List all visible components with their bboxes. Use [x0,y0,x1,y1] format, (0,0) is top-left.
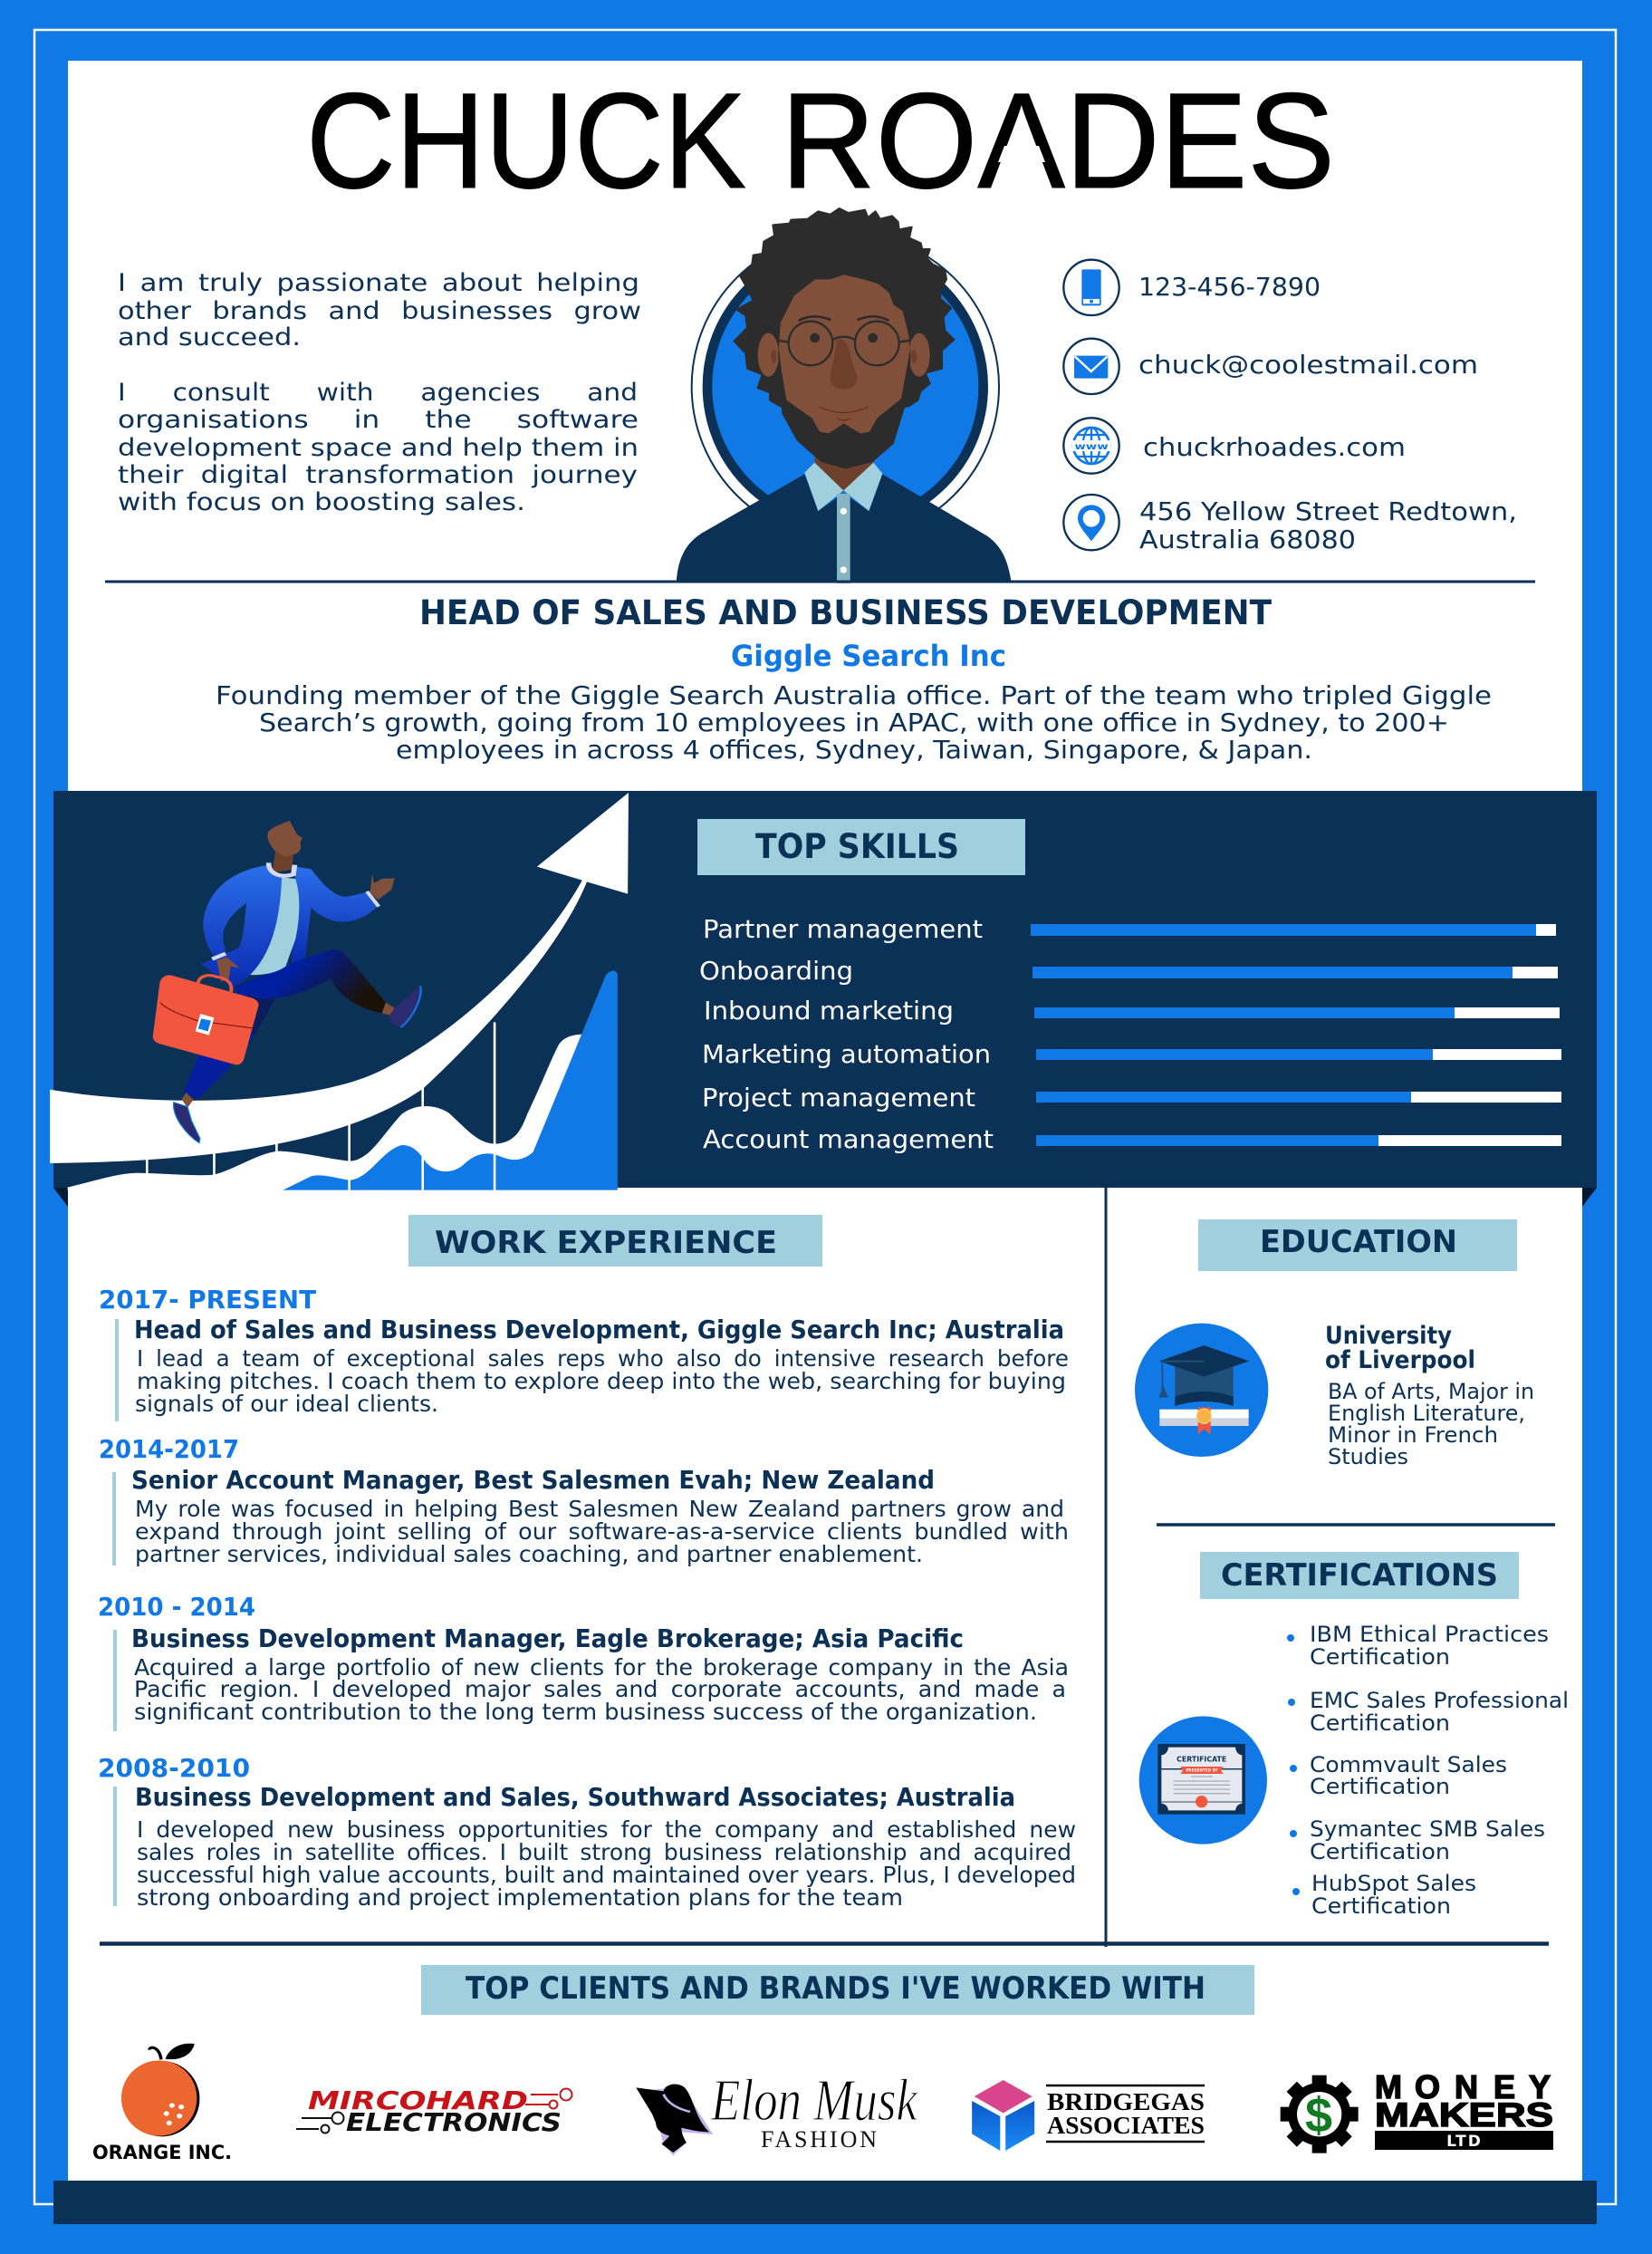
skill: onboarding [699,957,1558,986]
logo: elon musk fashion: Elon Musk [710,2067,918,2134]
job entry: 2008 to 2010: sales roles in satellite offices. I built strong business relationship and acquired [137,1839,1071,1865]
job entry: 2008 to 2010: strong onboarding and project implementation plans for the team [137,1884,903,1911]
university details: BA of Arts, Major in [1328,1379,1534,1404]
title [306,64,1335,217]
logo: money makers: MONEY [1375,2068,1551,2105]
skill: partner management [703,915,1556,944]
university details: Minor in French [1328,1422,1498,1448]
skill: marketing automation: Marketing automation [702,1040,991,1069]
logo: orange inc [121,2044,199,2136]
icon: phone [1063,260,1119,315]
logo: bridgegas associates: ASSOCIATES [1047,2112,1205,2139]
certification list: Certification [1310,1710,1450,1736]
summary paragraph: Search’s growth, going from 10 employees in APAC, with one office in Sydney, to 200+ [259,708,1449,737]
skill: inbound marketing [704,997,1560,1026]
certification list: Certification [1311,1893,1451,1919]
certification list: Commvault Sales [1310,1752,1507,1777]
job entry: 2017 to present [99,1285,1069,1421]
job entry: 2010 to 2014: significant contribution to the long term business success of the organization. [134,1699,1037,1725]
job entry: 2008 to 2010: 2008-2010 [98,1753,250,1783]
title: CHUCK [306,64,746,217]
portrait illustration [677,208,1012,583]
growth arrow and chart illustration [50,793,629,1190]
icon: graduation cap [1135,1324,1268,1457]
job entry: 2014 to 2017: 2014-2017 [99,1434,239,1464]
logo: mircohard electronics: MIRCOHARD [308,2085,528,2115]
job entry: 2010 to 2014: Acquired a large portfolio of new clients for the brokerage company in the Asia [134,1654,1069,1681]
skill: inbound marketing: Inbound marketing [704,997,954,1026]
job entry: 2008 to 2010: successful high value accounts, built and maintained over years. Plus, I developed [137,1862,1076,1888]
logo: bridgegas associates: BRIDGEGAS [1047,2088,1205,2115]
university details [1325,1322,1534,1469]
icon: web globe [1063,418,1119,474]
company name: Giggle Search Inc [731,639,1006,673]
job heading: HEAD OF SALES AND BUSINESS DEVELOPMENT [419,593,1273,632]
skill: project management [702,1084,1561,1113]
divider above clients [100,1941,1549,1946]
heading: education [1198,1219,1517,1271]
logo text: orange inc: ORANGE INC. [92,2142,232,2163]
certification list: Certification [1310,1839,1450,1864]
icon: certificate: CERTIFICATE [1177,1755,1226,1764]
skill: partner management: Partner management [703,915,983,944]
certification list: Certification [1310,1774,1450,1799]
certification list: IBM Ethical Practices [1310,1622,1549,1647]
job entry: 2017 to present: 2017- PRESENT [99,1285,316,1315]
job entry: 2017 to present: making pitches. I coach them to explore deep into the web, searching for buying [137,1368,1066,1394]
certification list: Symantec SMB Sales [1310,1816,1545,1842]
postal address: Australia 68080 [1139,525,1356,554]
divider in right column [1157,1523,1555,1527]
icon: email [1063,339,1119,394]
logo: money makers: $ [1305,2088,1332,2143]
postal address [1139,497,1517,554]
certification list: HubSpot Sales [1311,1871,1476,1896]
logo: money makers: MAKERS [1375,2096,1553,2134]
logo: mircohard electronics: ELECTRONICS [346,2107,562,2137]
certification list: EMC Sales Professional [1310,1688,1569,1713]
icon: web globe: www [1074,442,1109,452]
intro text [118,269,641,516]
job entry: 2014 to 2017: Senior Account Manager, Best Salesmen Evah; New Zealand [131,1465,935,1495]
heading: top skills [697,819,1025,875]
skill: project management: Project management [702,1084,975,1113]
job entry: 2014 to 2017: expand through joint selling of our software-as-a-service clients bundled with [135,1518,1069,1545]
phone number: 123-456-7890 [1138,273,1321,302]
bottom band [53,2181,1597,2224]
postal address: 456 Yellow Street Redtown, [1139,497,1517,526]
logo: elon musk fashion: FASHION [761,2126,877,2153]
skill: account management [703,1125,1561,1154]
column divider [1105,1188,1107,1947]
summary paragraph: employees in across 4 offices, Sydney, Taiwan, Singapore, & Japan. [396,735,1312,765]
intro text: I am truly passionate about helping [118,269,639,297]
heading: work experience [408,1215,822,1267]
job entry: 2017 to present: I lead a team of exceptional sales reps who also do intensive research before [137,1345,1069,1372]
job entry: 2010 to 2014: Business Development Manager, Eagle Brokerage; Asia Pacific [131,1623,964,1653]
certification list: Certification [1310,1644,1450,1670]
logo: money makers [1281,2068,1553,2153]
university details: English Literature, [1328,1401,1525,1426]
logo: money makers: LTD [1446,2133,1483,2151]
logo: mircohard electronics [296,2085,572,2137]
intro text: other brands and businesses grow [118,297,641,325]
icon: certificate [1139,1716,1267,1845]
job entry: 2017 to present: Head of Sales and Business Development, Giggle Search Inc; Australia [134,1315,1064,1344]
university details: University [1325,1322,1452,1350]
university details: Studies [1328,1444,1408,1469]
certification list [1287,1622,1569,1919]
heading: top clients: TOP CLIENTS AND BRANDS I'VE WORKED WITH [466,1970,1205,2007]
job entry: 2017 to present: signals of our ideal clients. [135,1391,438,1417]
email address: chuck@coolestmail.com [1138,351,1478,380]
website: chuckrhoades.com [1143,433,1406,462]
job entry: 2014 to 2017 [99,1434,1069,1567]
heading: top clients [421,1965,1254,2015]
intro text: and succeed. [118,323,301,352]
intro text: development space and help them in [118,434,639,462]
title: ROADES [781,64,1335,217]
skill: onboarding: Onboarding [699,957,853,986]
job entry: 2014 to 2017: My role was focused in helping Best Salesmen New Zealand partners grow and [135,1496,1064,1522]
skill: account management: Account management [703,1125,994,1154]
job entry: 2008 to 2010 [98,1753,1076,1911]
job entry: 2010 to 2014: 2010 - 2014 [98,1592,255,1622]
icon: location pin [1063,495,1119,550]
top skills band [53,791,1597,1207]
icon: certificate: PRESENTED BY [1186,1768,1218,1773]
intro text: with focus on boosting sales. [118,488,525,516]
summary paragraph: Founding member of the Giggle Search Australia office. Part of the team who tripled Giggle [216,680,1492,710]
heading: work experience: WORK EXPERIENCE [435,1225,777,1261]
intro text: their digital transformation journey [118,461,638,489]
summary paragraph [216,680,1492,765]
job entry: 2014 to 2017: partner services, individual sales coaching, and partner enablement. [135,1541,923,1567]
job entry: 2008 to 2010: I developed new business opportunities for the company and established new [137,1816,1076,1843]
job entry: 2008 to 2010: Business Development and Sales, Southward Associates; Australia [135,1782,1015,1812]
job entry: 2010 to 2014: Pacific region. I developed major sales and corporate accounts, and made a [134,1676,1066,1702]
heading: certifications [1200,1552,1519,1599]
logo: bridgegas associates [972,2080,1205,2151]
logo: elon musk fashion [636,2067,918,2155]
skill: marketing automation [702,1040,1561,1069]
intro text: organisations in the software [118,406,639,434]
heading: education: EDUCATION [1260,1224,1457,1260]
heading: certifications: CERTIFICATIONS [1221,1557,1498,1594]
university details: of Liverpool [1325,1346,1475,1374]
intro text: I consult with agencies and [118,379,638,407]
job entry: 2010 to 2014 [98,1592,1069,1731]
heading: top skills: TOP SKILLS [755,827,959,866]
divider under header [105,580,1535,583]
